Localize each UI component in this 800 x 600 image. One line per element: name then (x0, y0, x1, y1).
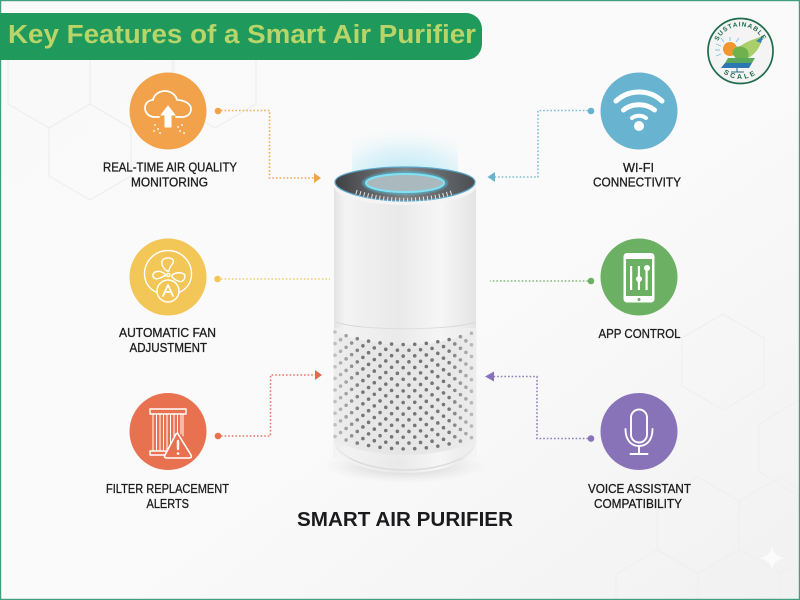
logo: Sustainable Scale: SUSTAINABLE (714, 22, 766, 40)
label: wi-fi connectivity (593, 161, 682, 190)
icon: microphone (626, 410, 652, 454)
logo: Sustainable Scale (707, 18, 774, 84)
circle: automatic fan adjustment (130, 238, 206, 316)
circle: app control (600, 238, 678, 316)
icon: phone with sliders (624, 253, 654, 302)
label: automatic fan adjustment: AUTOMATIC FAN (119, 326, 216, 340)
label: voice assistant compatibility: COMPATIBILITY (594, 497, 683, 511)
icon: wi-fi (616, 92, 662, 131)
product name: SMART AIR PURIFIER (297, 508, 513, 531)
label: filter replacement alerts (106, 482, 229, 511)
label: filter replacement alerts: ALERTS (146, 497, 189, 511)
sparkle (759, 546, 785, 570)
label: automatic fan adjustment (119, 326, 216, 355)
connector: wi-fi to purifier (488, 108, 594, 182)
icon: filter with warning triangle (150, 409, 191, 458)
label: wi-fi connectivity: WI-FI (623, 161, 654, 175)
label: filter replacement alerts: FILTER REPLACEMENT (106, 482, 229, 496)
label: voice assistant compatibility: VOICE ASSISTANT (588, 482, 691, 496)
circle: voice assistant compatibility (600, 393, 678, 470)
label: real-time air quality monitoring: REAL-TIME AIR QUALITY (103, 160, 238, 174)
connector: app to purifier (490, 278, 594, 284)
circle: air quality monitoring (130, 72, 206, 150)
circle: wi-fi connectivity (600, 72, 678, 150)
label: wi-fi connectivity: CONNECTIVITY (593, 176, 682, 190)
logo: Sustainable Scale: SCALE (724, 70, 756, 79)
label: app control: APP CONTROL (598, 327, 681, 341)
connector: voice to purifier (485, 372, 594, 442)
label: automatic fan adjustment: ADJUSTMENT (130, 341, 207, 355)
label: real-time air quality monitoring (103, 160, 238, 190)
connector: fan to purifier (214, 276, 330, 282)
connector: air quality to purifier (215, 108, 321, 183)
title banner: Key Features of a Smart Air Purifier (8, 21, 476, 49)
icon: cloud upload (145, 91, 191, 133)
icon: fan with A badge (144, 250, 192, 302)
smart air purifier illustration (323, 118, 487, 483)
title banner (0, 13, 482, 60)
label: real-time air quality monitoring: MONITORING (131, 176, 208, 190)
connector: filter to purifier (215, 370, 322, 439)
label: voice assistant compatibility (588, 482, 691, 511)
circle: filter replacement alerts (130, 393, 206, 470)
